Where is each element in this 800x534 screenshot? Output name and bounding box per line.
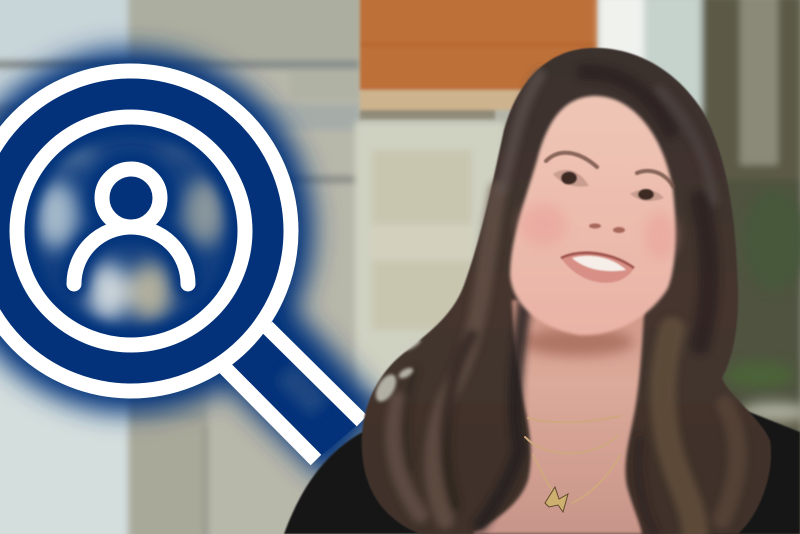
- mouth: [561, 251, 634, 283]
- face: [510, 96, 676, 335]
- inner ring glow: [19, 119, 243, 343]
- light gaps in hair: [372, 337, 422, 405]
- eyes: [553, 170, 664, 201]
- lens band: [0, 94, 268, 368]
- eyebrows: [546, 153, 673, 186]
- person glow inside lens: [74, 168, 188, 284]
- neck shadow: [522, 328, 634, 356]
- handle lines: [225, 327, 362, 460]
- magnifying glass icon: [0, 49, 385, 480]
- hair back: [362, 48, 771, 534]
- inner ring: [17, 117, 245, 345]
- nose: [589, 224, 625, 233]
- black top: [284, 390, 800, 534]
- outer ring: [0, 71, 291, 391]
- necklace pendant: [545, 487, 568, 512]
- icon glow: [0, 49, 385, 480]
- woman: [284, 48, 800, 534]
- handle fill: [225, 327, 362, 460]
- lens interior with background showing through: [28, 134, 232, 331]
- orange wood panel: [360, 0, 598, 120]
- chest and neck: [472, 300, 645, 534]
- hair strands: [394, 72, 737, 534]
- cheeks: [519, 203, 676, 259]
- necklaces: [525, 416, 620, 503]
- person icon: [74, 169, 188, 284]
